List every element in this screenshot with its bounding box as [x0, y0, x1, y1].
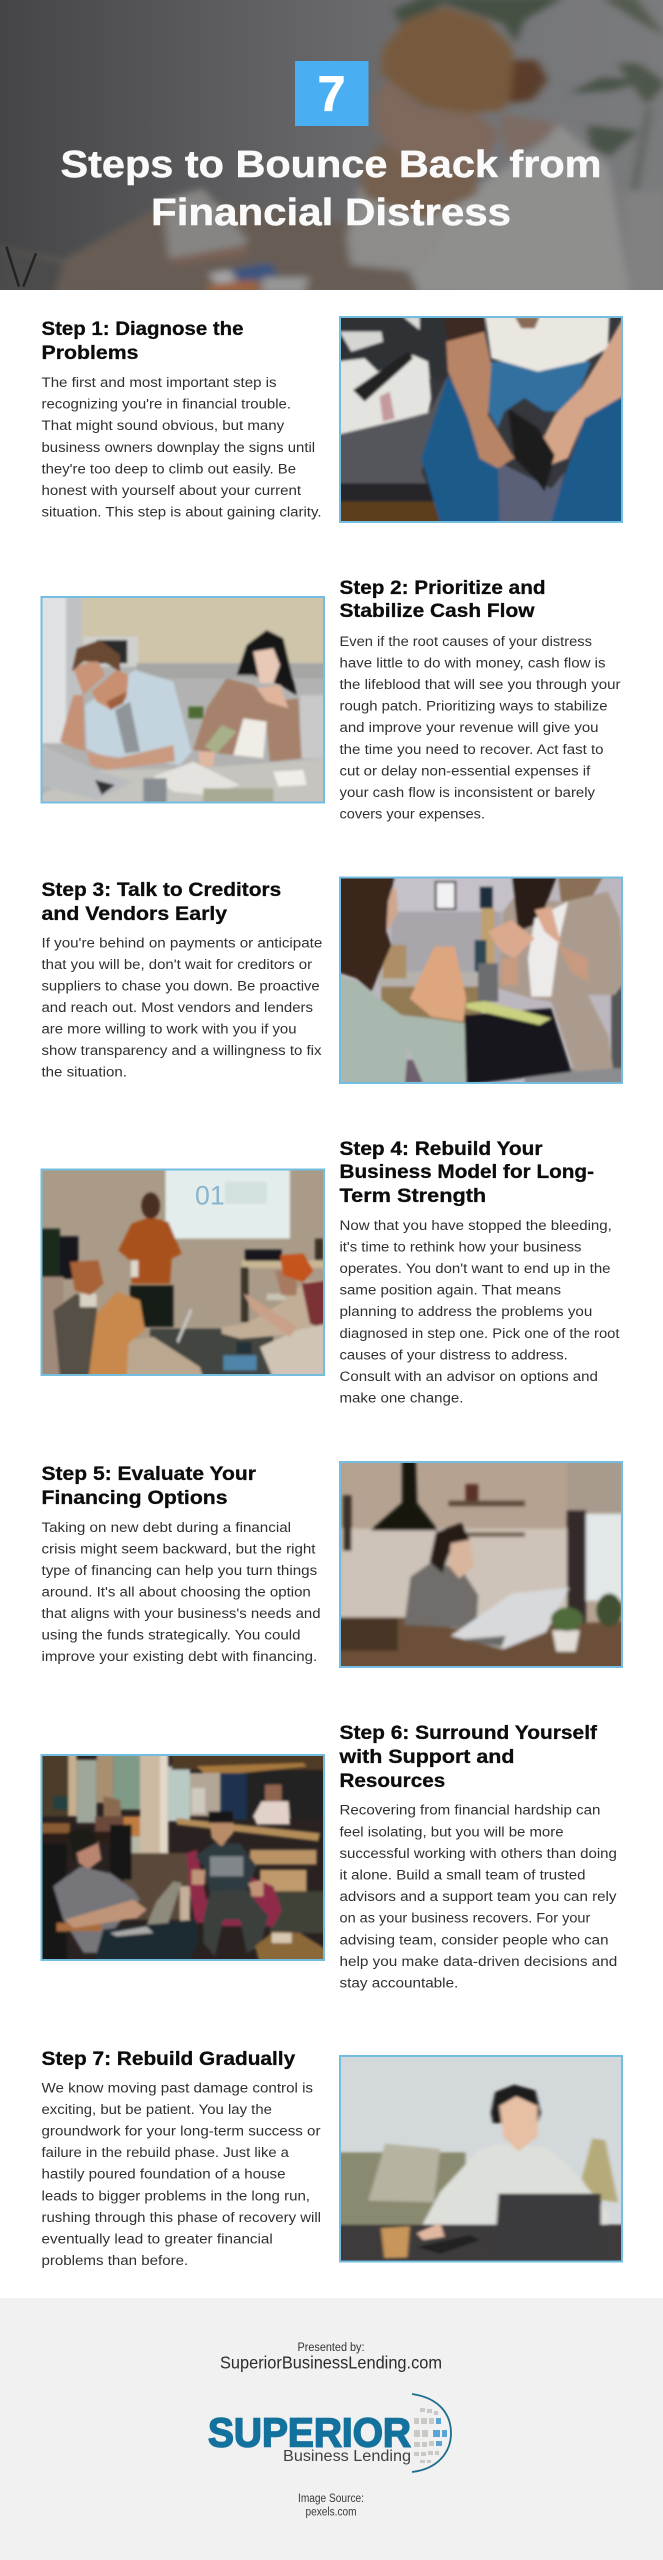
- photo: woman laughing at laptop in kitchen: [335, 1458, 626, 1671]
- text: step 5 body: using the funds strategically. You could: [42, 1628, 300, 1642]
- text: step 4 body: [340, 1218, 620, 1405]
- text: step 4 body: same position again. That means: [340, 1283, 561, 1298]
- text: step 5 body: [42, 1520, 320, 1664]
- text: step 2 body: [340, 634, 621, 822]
- text: step 7 body: leads to bigger problems in the long run,: [42, 2188, 310, 2203]
- text: step 7 body: hastily poured foundation of a house: [42, 2167, 286, 2182]
- slide number in photo: 01: [195, 1180, 225, 1210]
- logo wordmark SUPERIOR: SUPERIOR: [208, 2410, 411, 2456]
- text: step 7 body: We know moving past damage control is: [42, 2080, 313, 2096]
- panel: step 3: [42, 873, 625, 1087]
- text: step 4 body: Now that you have stopped the bleeding,: [340, 1218, 612, 1233]
- photo: two men chatting in cafe: [38, 1751, 327, 1965]
- text: presented by: Presented by:: [298, 2342, 364, 2354]
- text: website: SuperiorBusinessLending.com: [220, 2352, 442, 2372]
- text: step 7 body: [42, 2080, 321, 2268]
- text: step 6 body: on as your business recovers. For your: [340, 1911, 591, 1926]
- text: step 3 body: [42, 935, 322, 1080]
- text: step 4 body: it's time to rethink how your business: [340, 1240, 582, 1255]
- heading: step 2: Stabilize Cash Flow: [340, 600, 535, 622]
- heading: step 4: Step 4: Rebuild Your: [340, 1138, 543, 1160]
- text: step 6 body: it alone. Build a small team of trusted: [340, 1868, 586, 1882]
- text: step 1 body: [42, 375, 322, 520]
- text: step 2 body: and improve your revenue will give you: [340, 720, 598, 735]
- text: step 4 body: diagnosed in step one. Pick one of the root: [340, 1326, 620, 1341]
- text: image source: [298, 2493, 364, 2518]
- text: step 6 body: advising team, consider people who can: [340, 1932, 608, 1947]
- text: step 3 body: are more willing to work with you if you: [42, 1022, 296, 1037]
- text: step 6 body: successful working with others than doing: [340, 1846, 617, 1861]
- heading: step 3: Step 3: Talk to Creditors: [42, 879, 281, 901]
- heading: step 1: Problems: [42, 342, 139, 364]
- badge: number 7: [295, 61, 368, 126]
- text: step 5 body: Taking on new debt during a financial: [42, 1520, 291, 1535]
- text: step 1 body: they're too deep to climb out easily. Be: [42, 461, 296, 476]
- text: step 1 body: business owners downplay the signs until: [42, 440, 315, 455]
- text: step 7 body: rushing through this phase of recovery will: [42, 2210, 321, 2225]
- text: step 1 body: situation. This step is about gaining clarity.: [42, 505, 322, 520]
- text: step 7 body: problems than before.: [42, 2253, 188, 2268]
- text: image source: pexels.com: [306, 2506, 356, 2518]
- text: step 2 body: rough patch. Prioritizing ways to stabilize: [340, 699, 608, 714]
- text: step 3 body: the situation.: [42, 1065, 127, 1080]
- text: step 5 body: type of financing can help you turn things: [42, 1563, 318, 1578]
- text: step 7 body: failure in the rebuild phase. Just like a: [42, 2145, 289, 2160]
- photo: smiling woman at laptop: [335, 2056, 626, 2266]
- text: step 2 body: covers your expenses.: [340, 806, 485, 822]
- photo: two women talking: [336, 873, 625, 1087]
- text: step 3 body: show transparency and a willingness to fix: [42, 1043, 322, 1058]
- panel: step 2: [38, 577, 621, 822]
- text: step 7 body: eventually lead to greater financial: [42, 2231, 273, 2246]
- title: [60, 144, 602, 234]
- badge: number 7: 7: [318, 66, 345, 122]
- photo: presenter in meeting: [38, 1165, 327, 1379]
- text: step 3 body: that you will be, don't wait for creditors or: [42, 957, 313, 972]
- text: step 6 body: stay accountable.: [340, 1976, 458, 1990]
- text: step 5 body: around. It's all about choosing the option: [42, 1584, 311, 1600]
- text: step 4 body: make one change.: [340, 1390, 464, 1405]
- logo globe arc and grid: [412, 2394, 451, 2472]
- text: step 1 body: The first and most important step is: [42, 375, 277, 390]
- heading: step 4: Term Strength: [340, 1185, 486, 1207]
- heading: step 4: Business Model for Long-: [340, 1161, 594, 1183]
- heading: step 5: [42, 1463, 256, 1509]
- text: step 5 body: improve your existing debt with financing.: [42, 1649, 317, 1664]
- panel: step 6: [38, 1722, 617, 1990]
- heading: step 2: [340, 577, 546, 622]
- panel: step 5: [42, 1458, 626, 1671]
- panel: footer: [0, 2298, 663, 2560]
- text: step 4 body: Consult with an advisor on options and: [340, 1369, 598, 1384]
- text: step 2 body: the lifeblood that will see you through your: [340, 677, 621, 692]
- text: step 2 body: cut or delay non-essential expenses if: [340, 763, 591, 778]
- text: step 6 body: [340, 1803, 617, 1990]
- text: step 5 body: crisis might seem backward, but the right: [42, 1542, 316, 1556]
- hero photo: woman with head in hands: [0, 0, 663, 290]
- heading: step 6: [338, 1722, 598, 1792]
- text: step 6 body: advisors and a support team you can rely: [340, 1889, 617, 1904]
- text: step 3 body: and reach out. Most vendors and lenders: [42, 1000, 313, 1015]
- text: step 6 body: feel isolating, but you will be more: [340, 1824, 564, 1839]
- logo subline Business Lending: Business Lending: [283, 2448, 411, 2465]
- text: step 2 body: Even if the root causes of your distress: [340, 634, 592, 649]
- text: step 1 body: recognizing you're in financial trouble.: [42, 397, 291, 412]
- text: step 2 body: your cash flow is inconsistent or barely: [340, 785, 595, 800]
- heading: step 4: [340, 1138, 594, 1207]
- text: step 7 body: groundwork for your long-term success or: [42, 2124, 321, 2139]
- text: step 6 body: Recovering from financial hardship can: [340, 1803, 600, 1818]
- title: Financial Distress: [151, 192, 511, 234]
- text: step 1 body: That might sound obvious, but many: [42, 418, 285, 433]
- text: step 2 body: the time you need to recover. Act fast to: [340, 742, 604, 757]
- heading: step 3: [42, 879, 281, 925]
- heading: step 1: [42, 318, 244, 364]
- text: step 1 body: honest with yourself about your current: [42, 483, 301, 498]
- panel: step 7: [42, 2048, 626, 2268]
- heading: step 6: with Support and: [338, 1746, 514, 1768]
- photo: worried couple with bills: [38, 593, 328, 807]
- heading: step 6: Resources: [340, 1770, 445, 1792]
- panel: hero header: [0, 0, 663, 293]
- heading: step 6: Step 6: Surround Yourself: [340, 1722, 598, 1744]
- photo: person holding empty wallet: [335, 312, 625, 527]
- text: step 4 body: causes of your distress to address.: [340, 1347, 568, 1362]
- title: Steps to Bounce Back from: [60, 144, 602, 186]
- text: step 3 body: If you're behind on payments or anticipate: [42, 935, 322, 950]
- text: step 5 body: that aligns with your business's needs and: [42, 1606, 320, 1621]
- heading: step 7: Step 7: Rebuild Gradually: [42, 2048, 295, 2070]
- panel: step 1: [42, 312, 625, 527]
- logo: Superior Business Lending: [208, 2394, 451, 2472]
- text: step 4 body: operates. You don't want to end up in the: [340, 1261, 610, 1276]
- heading: step 3: and Vendors Early: [42, 903, 227, 925]
- text: step 7 body: exciting, but be patient. You lay the: [42, 2102, 272, 2117]
- text: step 3 body: suppliers to chase you down. Be proactive: [42, 978, 320, 994]
- text: step 6 body: help you make data-driven decisions and: [340, 1954, 617, 1969]
- heading: step 2: Step 2: Prioritize and: [340, 577, 546, 599]
- text: step 4 body: planning to address the problems you: [340, 1304, 592, 1319]
- text: step 2 body: have little to do with money, cash flow is: [340, 656, 606, 671]
- heading: step 5: Financing Options: [42, 1487, 228, 1509]
- text: image source: Image Source:: [298, 2493, 364, 2505]
- heading: step 1: Step 1: Diagnose the: [42, 318, 244, 340]
- panel: step 4: [38, 1138, 620, 1405]
- heading: step 5: Step 5: Evaluate Your: [42, 1463, 256, 1485]
